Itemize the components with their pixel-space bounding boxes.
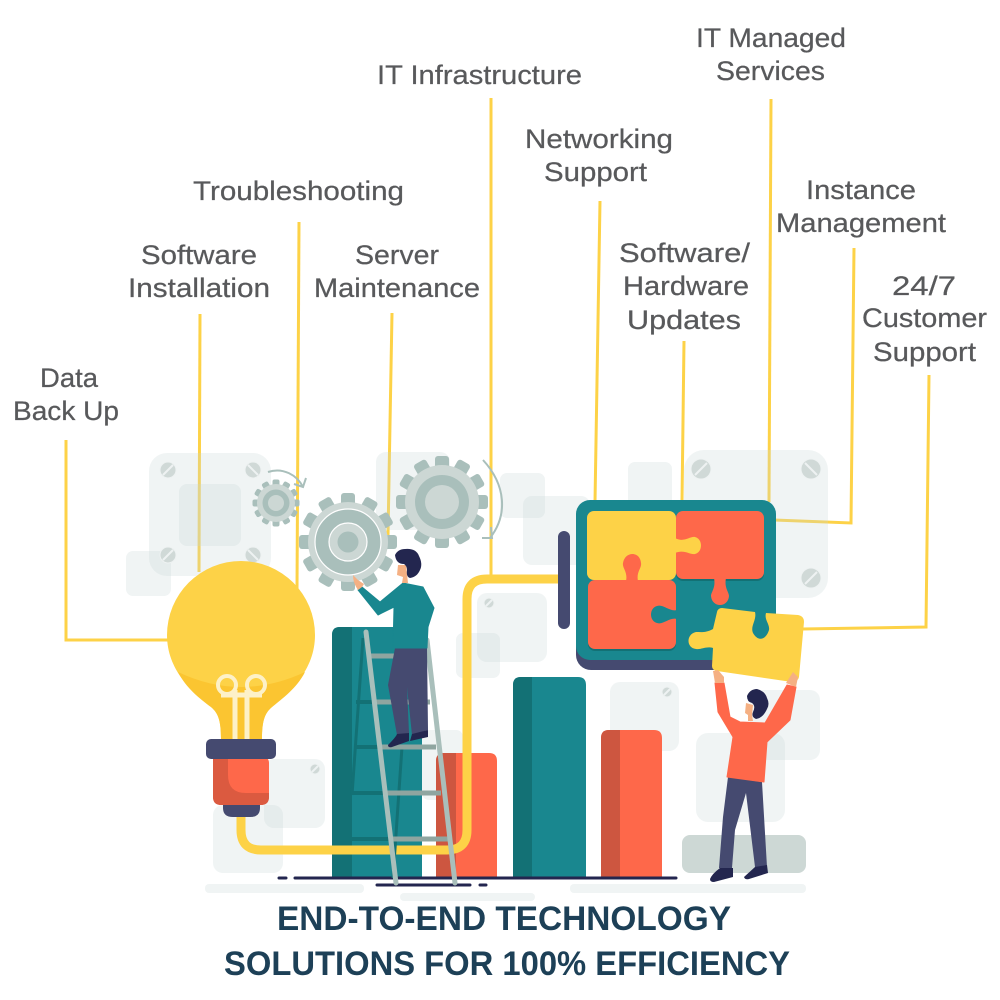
- ladder: [350, 632, 455, 883]
- bar: small coral: [601, 730, 662, 878]
- label: Software/Hardware Updates: Updates: [627, 305, 741, 335]
- puzzle piece: coral bottom left: [588, 554, 677, 651]
- label: 24/7 Customer Support: [862, 271, 987, 367]
- label: Data Back Up: [13, 363, 119, 426]
- yellow cable: [241, 579, 560, 850]
- label: IT Managed Services: [696, 23, 846, 86]
- gear: large: [396, 456, 488, 548]
- title: END-TO-END TECHNOLOGY: [277, 900, 731, 938]
- bulb filament: [218, 676, 265, 739]
- label: Instance Management: [776, 175, 947, 238]
- light bulb: [167, 561, 315, 817]
- label: Data Back Up: Data: [40, 363, 99, 393]
- connector lines: [66, 98, 929, 640]
- label: Networking Support: Support: [544, 157, 648, 187]
- label: 24/7 Customer Support: Customer: [862, 303, 987, 333]
- puzzle piece: yellow top left: [587, 511, 701, 580]
- label: Data Back Up: Back Up: [13, 396, 119, 426]
- label: 24/7 Customer Support: Support: [873, 337, 977, 367]
- puzzle piece: coral top right: [676, 511, 764, 605]
- title: SOLUTIONS FOR 100% EFFICIENCY: [224, 945, 790, 983]
- gear: small: [252, 480, 300, 526]
- label: IT Infrastructure: IT Infrastructure: [377, 60, 582, 90]
- bar: short coral: [436, 753, 497, 878]
- person lifting puzzle piece: [710, 670, 798, 882]
- puzzle board: [558, 500, 776, 670]
- label: Networking Support: [525, 124, 673, 187]
- label: 24/7 Customer Support: 24/7: [892, 271, 956, 301]
- label: Instance Management: Instance: [806, 175, 916, 205]
- label: Software/Hardware Updates: [619, 238, 751, 335]
- ground lines: [279, 878, 676, 885]
- label: Troubleshooting: Troubleshooting: [193, 176, 404, 206]
- label: Software Installation: Software: [141, 240, 257, 270]
- label: Software Installation: [128, 240, 270, 303]
- label: Server Maintenance: Maintenance: [314, 273, 480, 303]
- loose puzzle piece: [688, 608, 804, 682]
- gear: middle: [299, 493, 397, 591]
- label: Software/Hardware Updates: Software/: [619, 238, 751, 268]
- title: [224, 900, 790, 983]
- label: Server Maintenance: [314, 240, 480, 303]
- rotation arrows: [268, 460, 502, 538]
- label: IT Managed Services: IT Managed: [696, 23, 846, 53]
- label: Instance Management: Management: [776, 208, 947, 238]
- label: Software Installation: Installation: [128, 273, 270, 303]
- panel screws: [160, 459, 821, 774]
- person on ladder: [353, 549, 434, 747]
- background panels: [126, 450, 828, 901]
- bulb socket: [206, 739, 276, 817]
- label: IT Managed Services: Services: [716, 56, 825, 86]
- bar: medium teal: [513, 677, 586, 878]
- bar: tall teal with shadow: [332, 627, 422, 878]
- label: Software/Hardware Updates: Hardware: [623, 271, 749, 301]
- label: Server Maintenance: Server: [355, 240, 439, 270]
- label: Networking Support: Networking: [525, 124, 673, 154]
